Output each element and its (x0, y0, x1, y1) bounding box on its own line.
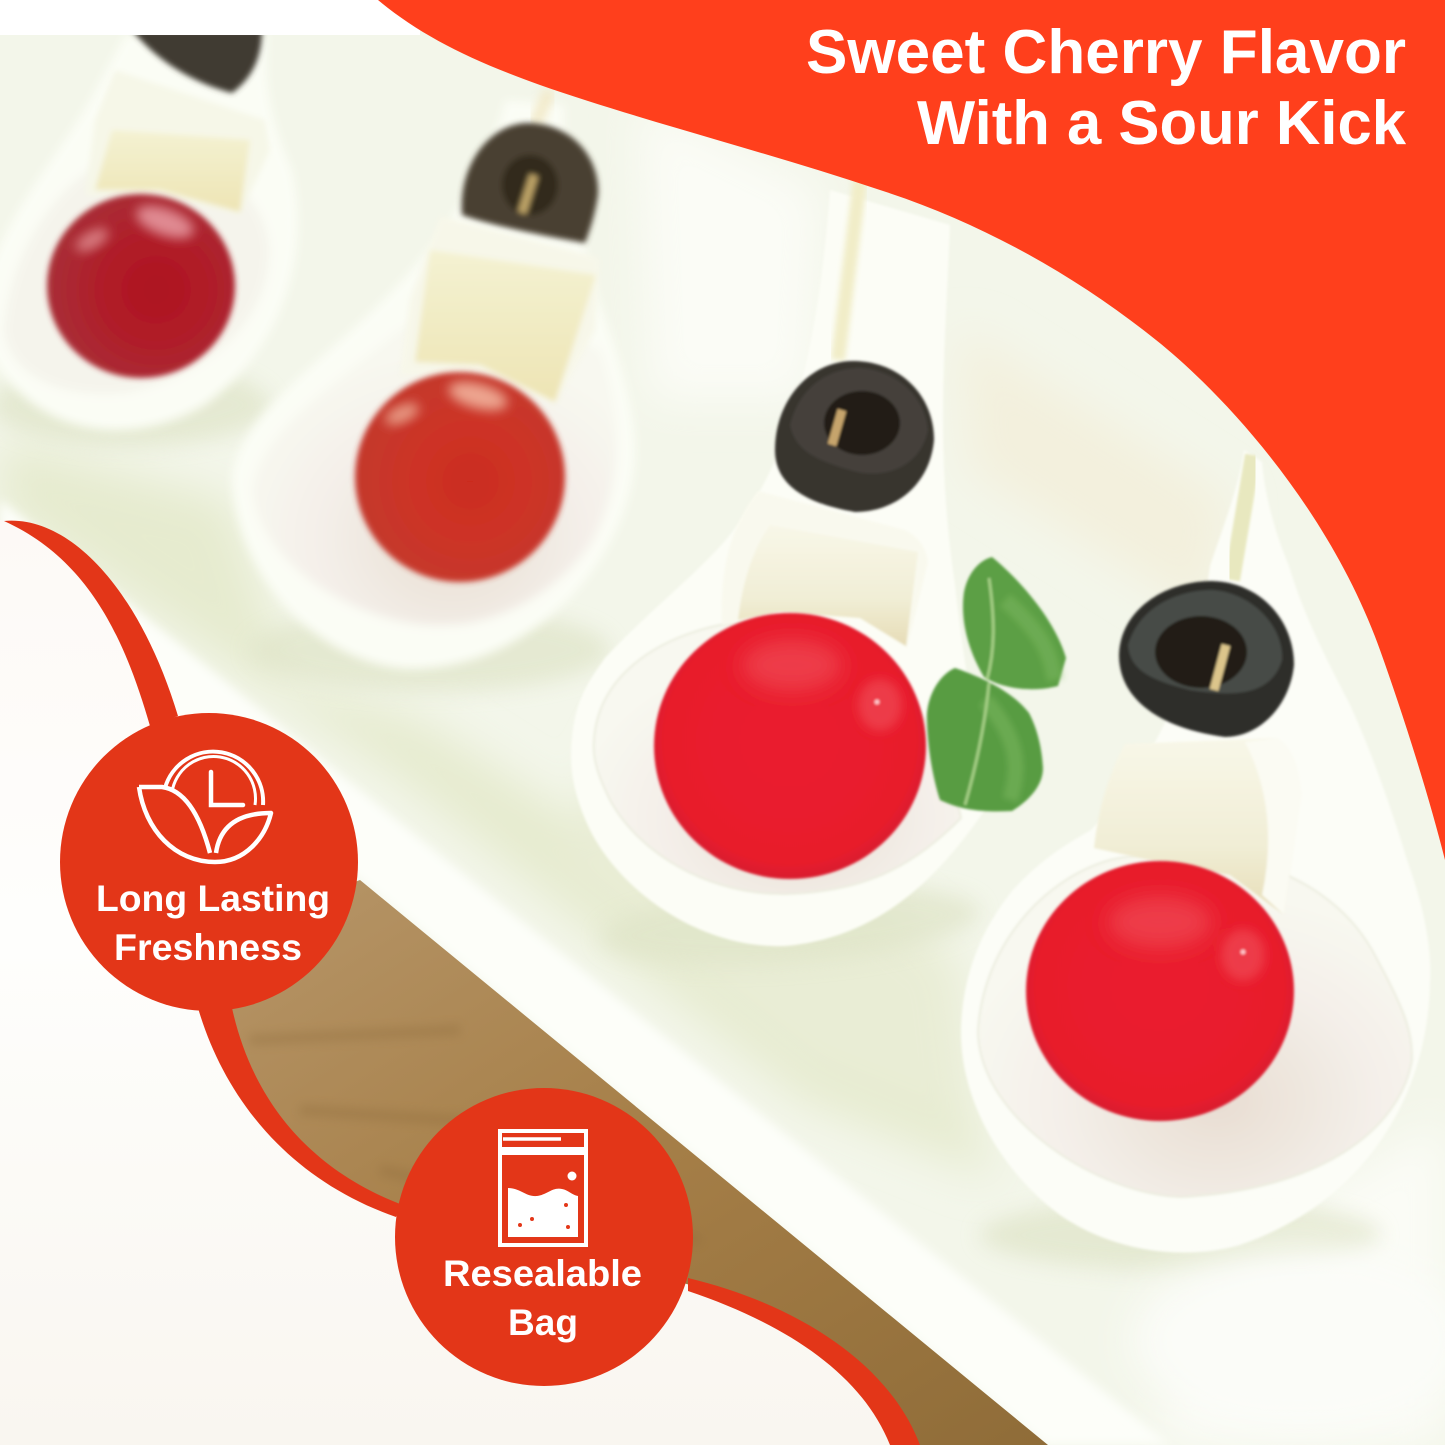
tray front rim (0, 500, 1170, 1445)
heading: With a Sour Kick (917, 89, 1407, 158)
fourth cheese (1094, 738, 1301, 915)
spoon 3 (571, 190, 984, 946)
icon: leaf and clock (139, 752, 271, 862)
white blur on tray corner (1130, 1250, 1445, 1430)
label: Long Lasting (96, 878, 330, 919)
second olive (462, 123, 598, 243)
label (96, 878, 330, 968)
second cheese (400, 216, 600, 405)
spoon 1 (0, 35, 298, 430)
badge: long lasting freshness (60, 713, 358, 1011)
second cherry (355, 372, 565, 582)
far cherry (47, 194, 235, 378)
top-left white strip (0, 0, 420, 35)
label: Freshness (114, 927, 302, 968)
red ribbon connector (4, 521, 920, 1445)
red top banner (378, 0, 1445, 860)
far olive and cheese (85, 30, 270, 215)
label: Resealable (443, 1253, 642, 1294)
third cherry (654, 613, 926, 879)
third olive (775, 361, 934, 512)
heading: Sweet Cherry Flavor (806, 18, 1406, 87)
label (443, 1253, 642, 1343)
fourth cherry (1026, 861, 1294, 1121)
skewers (535, 90, 1253, 580)
badge: resealable bag (395, 1088, 693, 1386)
label: Bag (508, 1302, 578, 1343)
heading (806, 18, 1407, 158)
icon: resealable bag (500, 1131, 586, 1245)
third cheese (722, 491, 928, 648)
mint leaves (927, 557, 1066, 811)
wood table (150, 880, 1048, 1445)
left white panel (0, 520, 905, 1445)
spoon 2 (232, 100, 635, 669)
fourth olive (1119, 581, 1294, 737)
spoon shadows (0, 363, 1380, 1271)
spoon 4 (961, 450, 1430, 1253)
